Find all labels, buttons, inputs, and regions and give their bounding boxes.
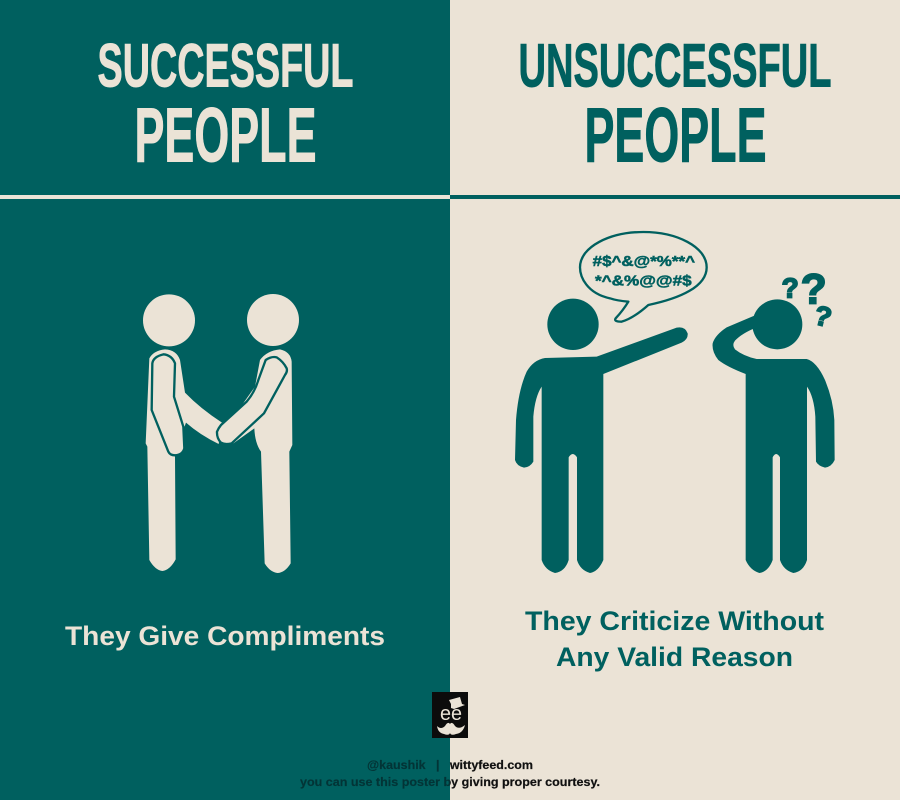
heading: successful people: SUCCESSFUL — [98, 32, 354, 100]
credit text — [300, 760, 600, 789]
speech bubble: *^&%@@#$ — [595, 273, 692, 289]
caption: they criticize without any valid reason: They Criticize Without — [525, 606, 824, 636]
icon: hat and moustache logo — [432, 692, 468, 738]
icon: two people shaking hands — [143, 294, 299, 573]
question marks — [782, 266, 835, 333]
heading: successful people: PEOPLE — [134, 92, 316, 178]
heading: unsuccessful people: PEOPLE — [584, 92, 766, 178]
credit text: you can use this poster by giving proper courtesy. — [300, 777, 600, 789]
caption: they criticize without any valid reason: Any Valid Reason — [556, 642, 793, 672]
caption: they give compliments: They Give Compliments — [65, 621, 385, 651]
confused figure — [713, 299, 835, 573]
panel: unsuccessful people — [450, 0, 900, 800]
heading: unsuccessful people — [518, 32, 832, 178]
right person — [217, 294, 299, 573]
icon: hat and moustache logo: ee — [440, 703, 462, 725]
speech bubble — [580, 232, 707, 322]
critic figure — [515, 299, 688, 573]
question marks: ? — [782, 272, 799, 303]
panel: successful people — [0, 0, 450, 800]
speech bubble: #$^&@*%**^ — [593, 254, 695, 270]
left person — [143, 294, 222, 571]
icon: person criticizing and confused person — [515, 232, 835, 573]
question marks: ? — [801, 266, 827, 314]
heading: successful people — [98, 32, 354, 178]
caption: they criticize without any valid reason — [525, 606, 824, 672]
question marks: ? — [811, 299, 835, 333]
credit text: @kaushik | wittyfeed.com — [367, 760, 533, 772]
